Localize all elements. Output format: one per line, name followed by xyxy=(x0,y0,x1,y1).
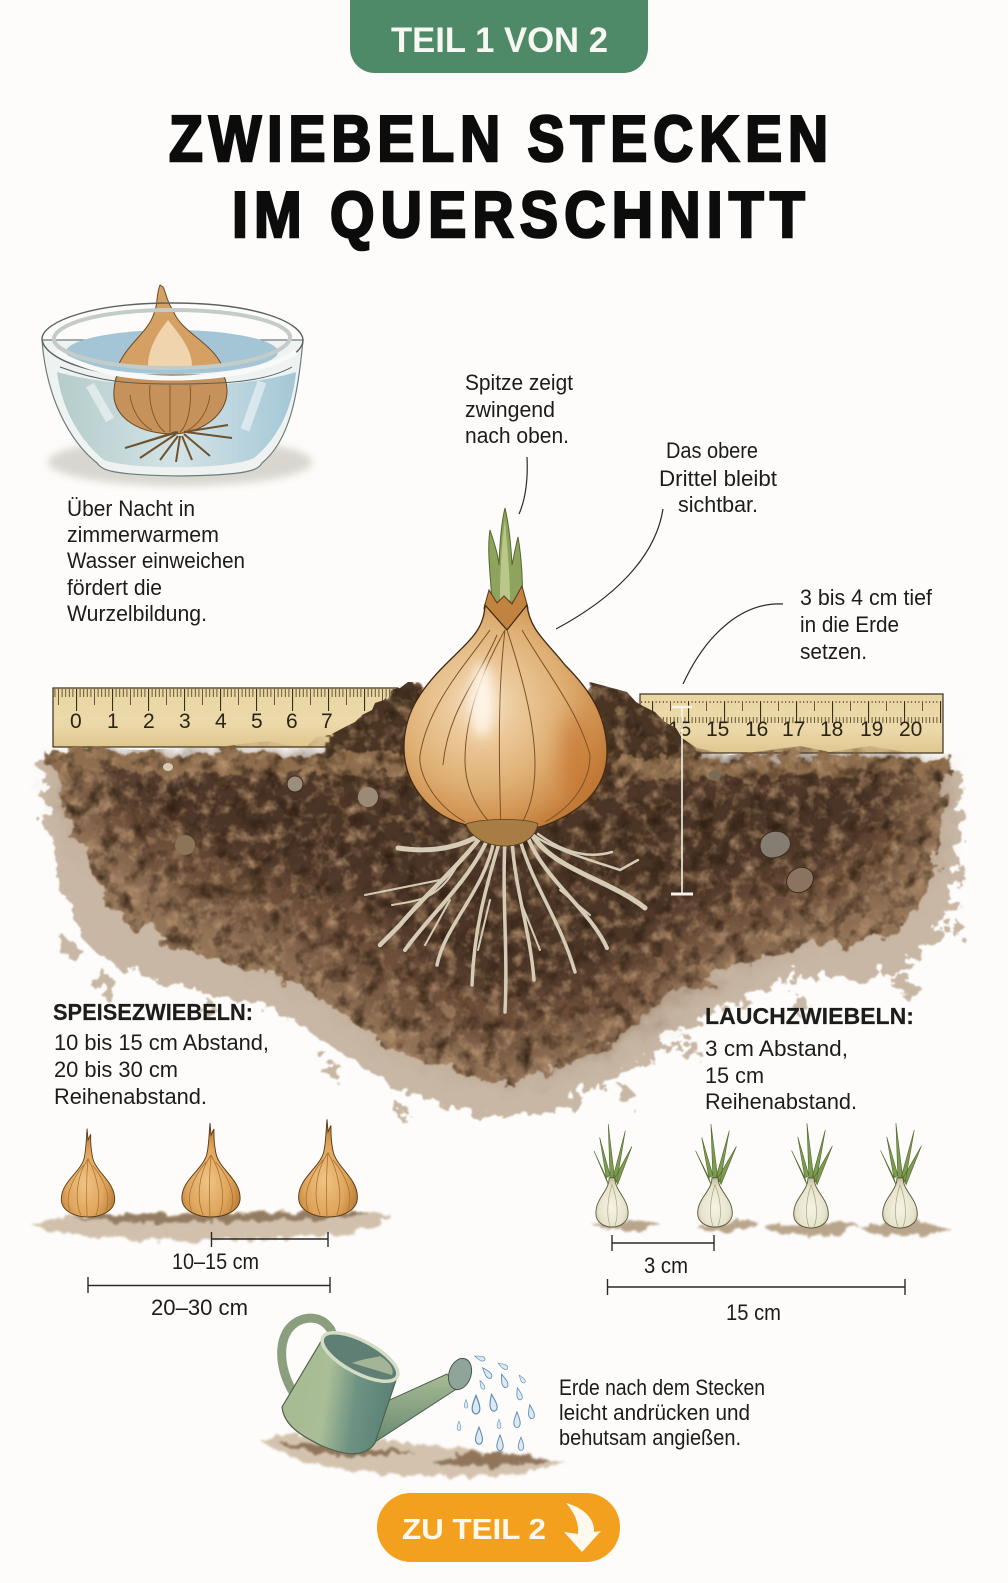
callout: oberes Drittel: Drittel bleibt xyxy=(659,466,777,491)
neck scales xyxy=(484,586,528,640)
ruler left xyxy=(53,688,398,747)
ruler right: 18 xyxy=(820,718,843,741)
ground xyxy=(260,1434,566,1476)
heading: Speisezwiebeln: SPEISEZWIEBELN: xyxy=(53,999,253,1025)
badge: Teil 1 von 2 xyxy=(350,0,648,73)
root plate xyxy=(466,820,538,846)
ruler right: 20 xyxy=(899,718,922,741)
illustration: onion soaking in glass bowl xyxy=(42,285,312,486)
callout: Tiefe: setzen. xyxy=(800,639,867,664)
callout: Spitze: nach oben. xyxy=(465,423,569,448)
badge: Teil 1 von 2: TEIL 1 VON 2 xyxy=(391,21,608,60)
title xyxy=(169,102,834,251)
caption: watering: Erde nach dem Stecken xyxy=(559,1375,765,1400)
row of Speisezwiebeln xyxy=(32,1119,390,1241)
ruler left: 7 xyxy=(321,710,333,733)
caption: soaking: zimmerwarmem xyxy=(67,522,219,547)
callout: oberes Drittel xyxy=(556,438,777,629)
stones in soil xyxy=(163,763,818,898)
bulb ribs xyxy=(420,630,590,829)
row of Lauchzwiebeln xyxy=(594,1123,950,1236)
callout: Tiefe: 3 bis 4 cm tief xyxy=(800,585,933,610)
callout: oberes Drittel: sichtbar. xyxy=(678,492,758,517)
soil cross-section xyxy=(43,683,965,1118)
title: ZWIEBELN STECKEN xyxy=(169,102,834,175)
ruler right: 15 xyxy=(706,718,729,741)
caption: soaking: Über Nacht in xyxy=(67,496,195,521)
ruler right: 15 xyxy=(668,718,691,741)
heading: Lauchzwiebeln: LAUCHZWIEBELN: xyxy=(705,1003,914,1029)
dimensions: Lauchzwiebeln: 15 cm xyxy=(726,1300,781,1325)
heading: Speisezwiebeln: 20 bis 30 cm xyxy=(54,1057,178,1082)
rim xyxy=(315,1323,405,1391)
ruler left: 1 xyxy=(107,710,119,733)
dimensions: Lauchzwiebeln xyxy=(608,1235,905,1325)
caption: soaking: Wasser einweichen xyxy=(67,548,245,573)
caption: soaking xyxy=(67,496,245,626)
bulb xyxy=(404,605,607,830)
ruler left: 2 xyxy=(143,710,155,733)
ruler left: 4 xyxy=(215,710,227,733)
ruler right: 19 xyxy=(860,718,883,741)
dimensions: Speisezwiebeln xyxy=(88,1232,330,1320)
button: zu Teil 2: ZU TEIL 2 xyxy=(402,1514,546,1546)
dimensions: Lauchzwiebeln: 3 cm xyxy=(644,1253,688,1278)
soil dark core xyxy=(95,768,905,995)
title: IM QUERSCHNITT xyxy=(232,178,811,251)
callout: Spitze: Spitze zeigt xyxy=(465,370,573,395)
button: zu Teil 2 xyxy=(377,1493,620,1562)
caption: soaking: fördert die xyxy=(67,575,162,600)
ruler right: 16 xyxy=(745,718,768,741)
soil top crust xyxy=(50,750,950,779)
callout: Spitze: zwingend xyxy=(465,397,555,422)
ruler left: 3 xyxy=(179,710,191,733)
soil faded edge wash xyxy=(43,760,965,1118)
ground xyxy=(32,1212,390,1241)
icon: curved arrow xyxy=(564,1503,601,1552)
heading: Speisezwiebeln: Reihenabstand. xyxy=(54,1084,207,1109)
heading: Lauchzwiebeln: 15 cm xyxy=(705,1063,764,1088)
ruler left: 6 xyxy=(286,710,298,733)
callout: oberes Drittel: Das obere xyxy=(666,438,758,463)
body xyxy=(282,1338,397,1454)
heading: Lauchzwiebeln: Reihenabstand. xyxy=(705,1089,857,1114)
callout: Spitze xyxy=(465,370,573,514)
caption: watering: leicht andrücken und xyxy=(559,1400,750,1425)
callout: Tiefe xyxy=(683,585,933,684)
soil mounds xyxy=(300,683,705,785)
ruler left: 0 xyxy=(70,710,82,733)
water drops xyxy=(457,1354,535,1450)
ruler right xyxy=(640,694,943,753)
ground xyxy=(594,1220,950,1236)
heading: Lauchzwiebeln xyxy=(705,1003,914,1114)
ruler right: 17 xyxy=(782,718,805,741)
handle xyxy=(282,1318,332,1392)
heading: Lauchzwiebeln: 3 cm Abstand, xyxy=(705,1036,848,1061)
callout: Tiefe: in die Erde xyxy=(800,612,899,637)
shoots xyxy=(489,508,522,602)
soil mid tone xyxy=(75,765,926,1054)
heading: Speisezwiebeln: 10 bis 15 cm Abstand, xyxy=(54,1030,269,1055)
main onion with shoots xyxy=(404,508,607,846)
orange shading xyxy=(560,713,592,797)
illustration: watering can xyxy=(260,1318,566,1476)
dimensions: Speisezwiebeln: 10–15 cm xyxy=(172,1249,259,1274)
caption: watering: behutsam angießen. xyxy=(559,1425,741,1450)
heading: Speisezwiebeln xyxy=(53,999,269,1109)
soil outer body xyxy=(60,756,943,1082)
ruler left: 5 xyxy=(251,710,263,733)
spout xyxy=(372,1374,458,1442)
dimensions: Speisezwiebeln: 20–30 cm xyxy=(151,1295,248,1320)
depth marker xyxy=(671,707,693,894)
caption: soaking: Wurzelbildung. xyxy=(67,601,207,626)
caption: watering xyxy=(559,1375,765,1450)
roots xyxy=(365,834,645,1012)
